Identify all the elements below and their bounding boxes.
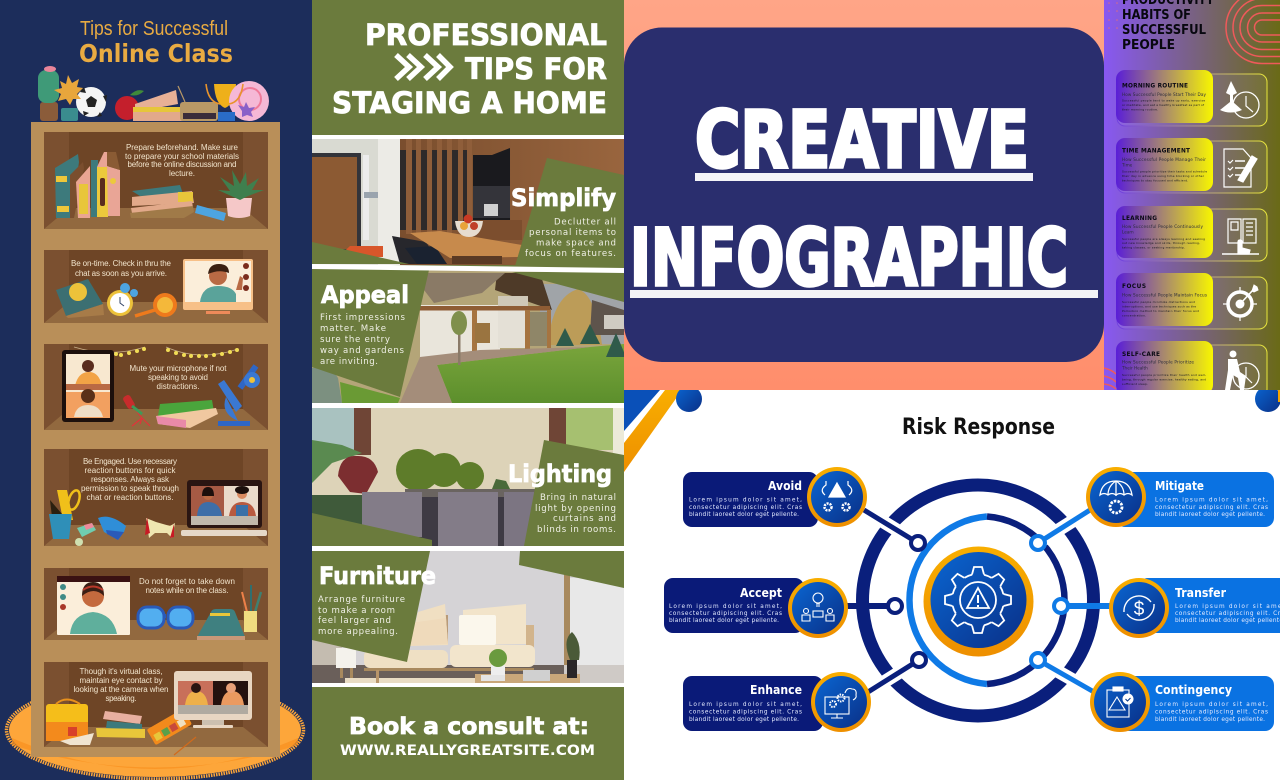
simplify text: personal items to — [529, 228, 616, 238]
item: avoid: Lorem ipsum dolor sit amet, — [689, 498, 802, 504]
furniture text: feel larger and — [318, 616, 391, 626]
card: morning routine: or meditate, and eat a healthy breakfast as part of — [1122, 103, 1205, 107]
title: risk response: Risk Response — [902, 415, 1055, 440]
item: enhance — [683, 672, 871, 732]
tip text 4: chat or reaction buttons. — [86, 493, 174, 502]
cup, scissors, stapler, apple, laptop — [49, 480, 267, 546]
icon: book and hand — [1222, 219, 1259, 254]
icon: chevron arrows — [396, 55, 450, 79]
concentric arcs decoration — [1104, 0, 1280, 389]
inner ring — [909, 516, 1065, 684]
tip text 1: to prepare your school materials — [125, 152, 239, 161]
tip text 2: chat as soon as you arrive. — [75, 269, 167, 278]
item: contingency: consectetur adipiscing elit. Cras — [1155, 710, 1268, 716]
card: learning — [1116, 206, 1267, 261]
tip text 1: lecture. — [169, 169, 195, 178]
icon: dollar exchange: $ — [1134, 599, 1145, 620]
card: learning: LEARNING — [1122, 216, 1157, 222]
item: contingency: blandit laoreet dolor eget pellente. — [1155, 717, 1265, 723]
icon: warning with gears — [822, 481, 852, 510]
lighting text: Lighting — [508, 460, 612, 488]
title: tips for successful online class — [80, 20, 232, 62]
card: learning: Successful people are always learning and seeking — [1122, 237, 1205, 241]
title: tips for successful online class: Online Class — [79, 39, 233, 68]
panel: tips for successful online class — [0, 0, 312, 780]
card: learning: out new knowledge and skills, through reading, — [1122, 241, 1200, 245]
card: focus — [1116, 273, 1267, 329]
title: productivity habits: SUCCESSFUL — [1122, 22, 1206, 38]
card: learning: Learn — [1122, 230, 1134, 234]
tip text 4: reaction buttons for quick — [84, 466, 176, 475]
card: self-care: Successful people prioritize their health and well- — [1122, 373, 1206, 377]
item: mitigate — [1086, 467, 1274, 527]
appeal text: way and gardens — [320, 346, 405, 356]
simplify text: make space and — [536, 238, 616, 248]
card: self-care: SELF-CARE — [1122, 352, 1160, 358]
bookshelf frame — [31, 122, 280, 757]
tip text 6 — [74, 667, 168, 703]
call to action footer — [340, 716, 594, 755]
item: mitigate: Lorem ipsum dolor sit amet, — [1155, 498, 1268, 504]
lighting text: blinds in rooms. — [537, 525, 616, 535]
item: accept — [664, 578, 848, 638]
tip text 6: speaking. — [106, 694, 136, 703]
furniture text — [318, 562, 436, 637]
card: morning routine: MORNING ROUTINE — [1122, 84, 1188, 90]
card: self-care: sufficient sleep. — [1122, 382, 1148, 386]
white dividers — [312, 135, 624, 687]
card: focus: How Successful People Maintain Focus — [1122, 292, 1207, 298]
item: contingency: Contingency — [1155, 682, 1232, 697]
lighting text: light by opening — [535, 504, 616, 514]
appeal text: are inviting. — [320, 357, 378, 367]
photo: patio lighting — [312, 408, 624, 546]
item: avoid: blandit laoreet dolor eget pellente. — [689, 512, 799, 518]
title: professional tips for staging a home: TIPS FOR — [465, 52, 607, 86]
appeal text: First impressions — [320, 313, 406, 323]
book, clock, magnifier, monitor — [56, 259, 253, 318]
icon: runner with clock — [1225, 350, 1259, 390]
item: mitigate: Mitigate — [1155, 478, 1204, 493]
connector: contingency — [1031, 653, 1094, 692]
tip text 4 — [81, 457, 179, 502]
appeal text — [320, 281, 409, 367]
card: time management: Successful people prioritize their tasks and schedule — [1122, 170, 1207, 174]
center gear badge — [924, 546, 1034, 656]
card: morning routine: Successful people tend to wake up early, exercise — [1122, 98, 1205, 102]
bag, books, paints, monitor — [46, 671, 252, 755]
item: accept: Lorem ipsum dolor sit amet, — [669, 604, 782, 610]
photo: sofa furniture — [312, 551, 624, 683]
shelf compartment 2 — [44, 250, 268, 323]
item: accept: blandit laoreet dolor eget pellente. — [669, 618, 779, 624]
tip text 2: Be on-time. Check in thru the — [71, 259, 172, 268]
simplify text: focus on features. — [525, 249, 616, 259]
icon: gear with warning triangle — [945, 567, 1011, 633]
simplify text: Declutter all — [554, 218, 616, 228]
card: focus: Pomodoro method to maintain their focus and — [1122, 309, 1199, 313]
tip text 6: maintain eye contact by — [80, 676, 162, 685]
card: time management — [1116, 138, 1267, 193]
tip text 2 — [71, 259, 172, 278]
card: time management: How Successful People Manage Their — [1122, 157, 1206, 162]
tip text 3: Mute your microphone if not — [130, 364, 227, 373]
shelf top objects — [38, 66, 269, 121]
appeal text: Appeal — [321, 281, 409, 309]
corner decoration right — [1255, 386, 1280, 412]
furniture text: more appealing. — [318, 627, 398, 637]
card: self-care: How Successful People Prioritize — [1122, 360, 1194, 364]
item: transfer — [1109, 578, 1280, 638]
shelf compartment 1 — [44, 132, 268, 229]
title: professional tips for staging a home: STAGING A HOME — [332, 86, 607, 120]
card: self-care: Their Health — [1121, 366, 1148, 370]
connector: avoid — [864, 510, 925, 550]
panel: professional tips for staging a home — [312, 0, 626, 780]
icon: checklist with pen — [1224, 149, 1257, 187]
decorative dots — [1108, 2, 1118, 29]
icon: yoga with clock — [1220, 81, 1259, 118]
simplify text — [511, 184, 616, 259]
photo: interior simplify — [312, 139, 624, 266]
tip text 5 — [140, 578, 234, 593]
card: time management: TIME MANAGEMENT — [1122, 148, 1190, 154]
card: time management: their day in advance using time blocking or other — [1122, 174, 1205, 178]
item: accept: Accept — [740, 585, 782, 600]
tip text 4: Be Engaged. Use necessary — [83, 457, 177, 466]
card: focus: FOCUS — [1122, 284, 1146, 290]
icon: dollar exchange — [1124, 596, 1154, 620]
card: self-care: being, through regular exercise, healthy eating, and — [1122, 378, 1206, 382]
tip text 6: looking at the camera when — [74, 685, 168, 694]
title: productivity habits — [1122, 0, 1211, 49]
item: enhance: Enhance — [750, 682, 802, 697]
item: contingency — [1090, 672, 1274, 732]
corner decoration left — [624, 386, 702, 472]
title: professional tips for staging a home — [334, 22, 607, 114]
icon: target with dart — [1223, 285, 1258, 321]
item: accept: consectetur adipiscing elit. Cras — [669, 611, 782, 617]
call to action footer: WWW.REALLYGREATSITE.COM — [340, 743, 595, 759]
title: productivity habits: HABITS OF — [1122, 7, 1191, 23]
item: mitigate: consectetur adipiscing elit. Cras — [1155, 505, 1268, 511]
lighting text — [508, 460, 616, 535]
appeal text: matter. Make — [320, 324, 386, 334]
card: focus: interruptions, and use techniques such as the — [1122, 304, 1196, 308]
furniture text: to make a room — [318, 606, 395, 616]
card: self-care — [1116, 341, 1267, 397]
tip text 4: responses. Always ask — [91, 475, 170, 484]
item: avoid — [683, 467, 867, 527]
card: focus: Successful people minimize distractions and — [1122, 300, 1195, 304]
navy rounded card — [624, 28, 1104, 362]
card: time management: Time — [1121, 162, 1133, 168]
card: morning routine: their morning routine. — [1122, 108, 1158, 112]
outer ring — [862, 485, 1094, 716]
card: morning routine — [1116, 70, 1267, 126]
panel: creative infographic — [624, 0, 1104, 390]
photo: house appeal — [312, 270, 626, 403]
title: creative: CREATIVE — [695, 96, 1029, 186]
furniture text: Furniture — [319, 562, 436, 590]
title: professional tips for staging a home: PROFESSIONAL — [365, 18, 607, 52]
card: learning: How Successful People Continuously — [1122, 224, 1204, 229]
title: infographic: INFOGRAPHIC — [630, 214, 1068, 304]
item: contingency: Lorem ipsum dolor sit amet, — [1155, 702, 1268, 708]
rug — [4, 701, 306, 780]
tip text 5: notes while on the class. — [146, 586, 228, 595]
item: enhance: Lorem ipsum dolor sit amet, — [689, 702, 802, 708]
tip text 1: before the online discussion and — [128, 160, 236, 169]
shelf compartment 5 — [44, 568, 268, 640]
card: learning: taking classes, or seeking mentorship. — [1122, 246, 1185, 250]
simplify text: Simplify — [511, 184, 616, 212]
tip text 5: Do not forget to take down — [139, 577, 235, 586]
tip text 1 — [125, 143, 239, 178]
tablet, lights, mic, books, microscope — [62, 347, 260, 428]
item: avoid: consectetur adipiscing elit. Cras — [689, 505, 802, 511]
icon: clipboard warning — [1107, 687, 1134, 717]
call to action footer: Book a consult at: — [349, 714, 589, 740]
connector: transfer — [1054, 599, 1110, 613]
books and plant — [55, 152, 264, 221]
icon: cloud and monitor gears — [825, 688, 856, 718]
video window, glasses, book, pencils — [57, 576, 261, 640]
connector: accept — [847, 599, 902, 613]
appeal text: sure the entry — [320, 335, 390, 345]
shelf compartment 3 — [44, 344, 268, 430]
tip text 3: speaking to avoid — [148, 373, 208, 382]
lighting text: curtains and — [553, 514, 616, 524]
shelf compartment 4 — [44, 449, 268, 546]
shelf compartment 6 — [44, 662, 268, 755]
card: morning routine: How Successful People Start Their Day — [1122, 92, 1207, 97]
item: mitigate: blandit laoreet dolor eget pellente. — [1155, 512, 1265, 518]
tip text 3: distractions. — [156, 382, 200, 391]
icon: idea and team — [802, 593, 834, 621]
card: focus: concentration. — [1122, 314, 1146, 318]
tip text 1: Prepare beforehand. Make sure — [126, 143, 239, 152]
tip text 6: Though it's virtual class, — [80, 667, 162, 676]
title: productivity habits: PEOPLE — [1122, 37, 1175, 53]
connector: enhance — [868, 653, 926, 692]
icon: umbrella and gear — [1100, 481, 1132, 513]
title: tips for successful online class: Tips for Successful — [80, 18, 228, 40]
panel: risk response — [624, 386, 1280, 780]
tip text 4: permission to speak through — [81, 484, 179, 493]
panel: productivity habits of successful people — [1104, 0, 1280, 397]
lighting text: Bring in natural — [540, 493, 616, 503]
furniture text: Arrange furniture — [318, 595, 405, 605]
card: time management: techniques to stay focused and efficient. — [1122, 178, 1188, 182]
connector: mitigate — [1031, 510, 1090, 550]
item: enhance: blandit laoreet dolor eget pellente. — [689, 717, 799, 723]
item: enhance: consectetur adipiscing elit. Cras — [689, 710, 802, 716]
item: transfer: Transfer — [1175, 585, 1227, 600]
tip text 3 — [130, 365, 226, 389]
item: avoid: Avoid — [768, 478, 802, 493]
